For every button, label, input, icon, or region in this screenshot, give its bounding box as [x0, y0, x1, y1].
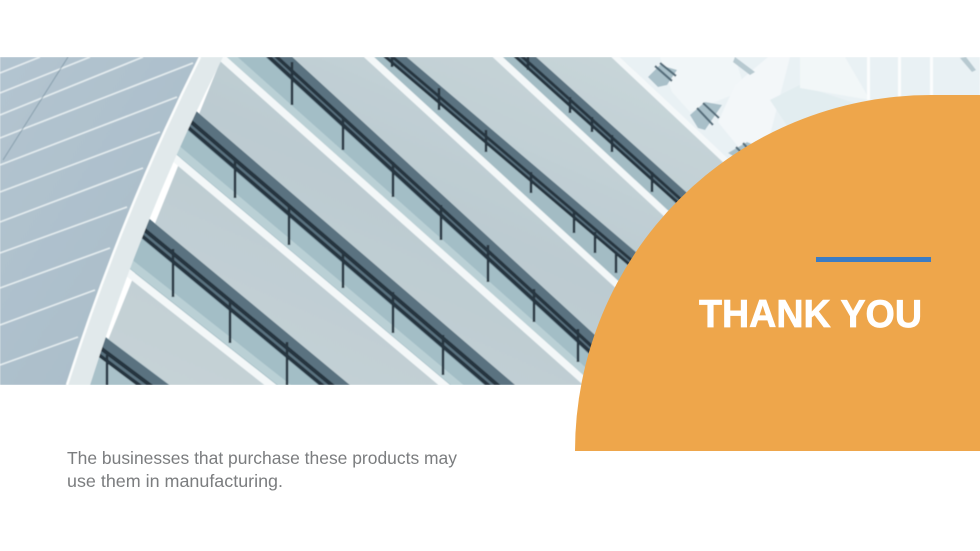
body text — [67, 448, 457, 491]
facade — [90, 57, 728, 385]
window band 2 — [174, 111, 515, 385]
heading: thank you: THANK YOU — [699, 293, 922, 336]
slide — [0, 57, 980, 490]
metal cladding — [0, 57, 200, 385]
ledge -2 — [612, 57, 728, 162]
white curved column — [67, 57, 223, 385]
orange quarter circle panel — [575, 95, 980, 451]
window band 3 — [128, 218, 350, 385]
building photo — [0, 57, 980, 385]
window band -1 — [492, 57, 687, 216]
body text line 2: use them in manufacturing. — [67, 471, 283, 491]
body text line 1: The businesses that purchase these products may — [67, 448, 457, 468]
blue accent bar — [816, 257, 931, 262]
top right white fins — [620, 57, 980, 197]
window band 1 — [220, 57, 594, 384]
fin windows — [648, 63, 756, 160]
window band 4 — [90, 336, 170, 385]
window band 0 — [364, 57, 636, 288]
